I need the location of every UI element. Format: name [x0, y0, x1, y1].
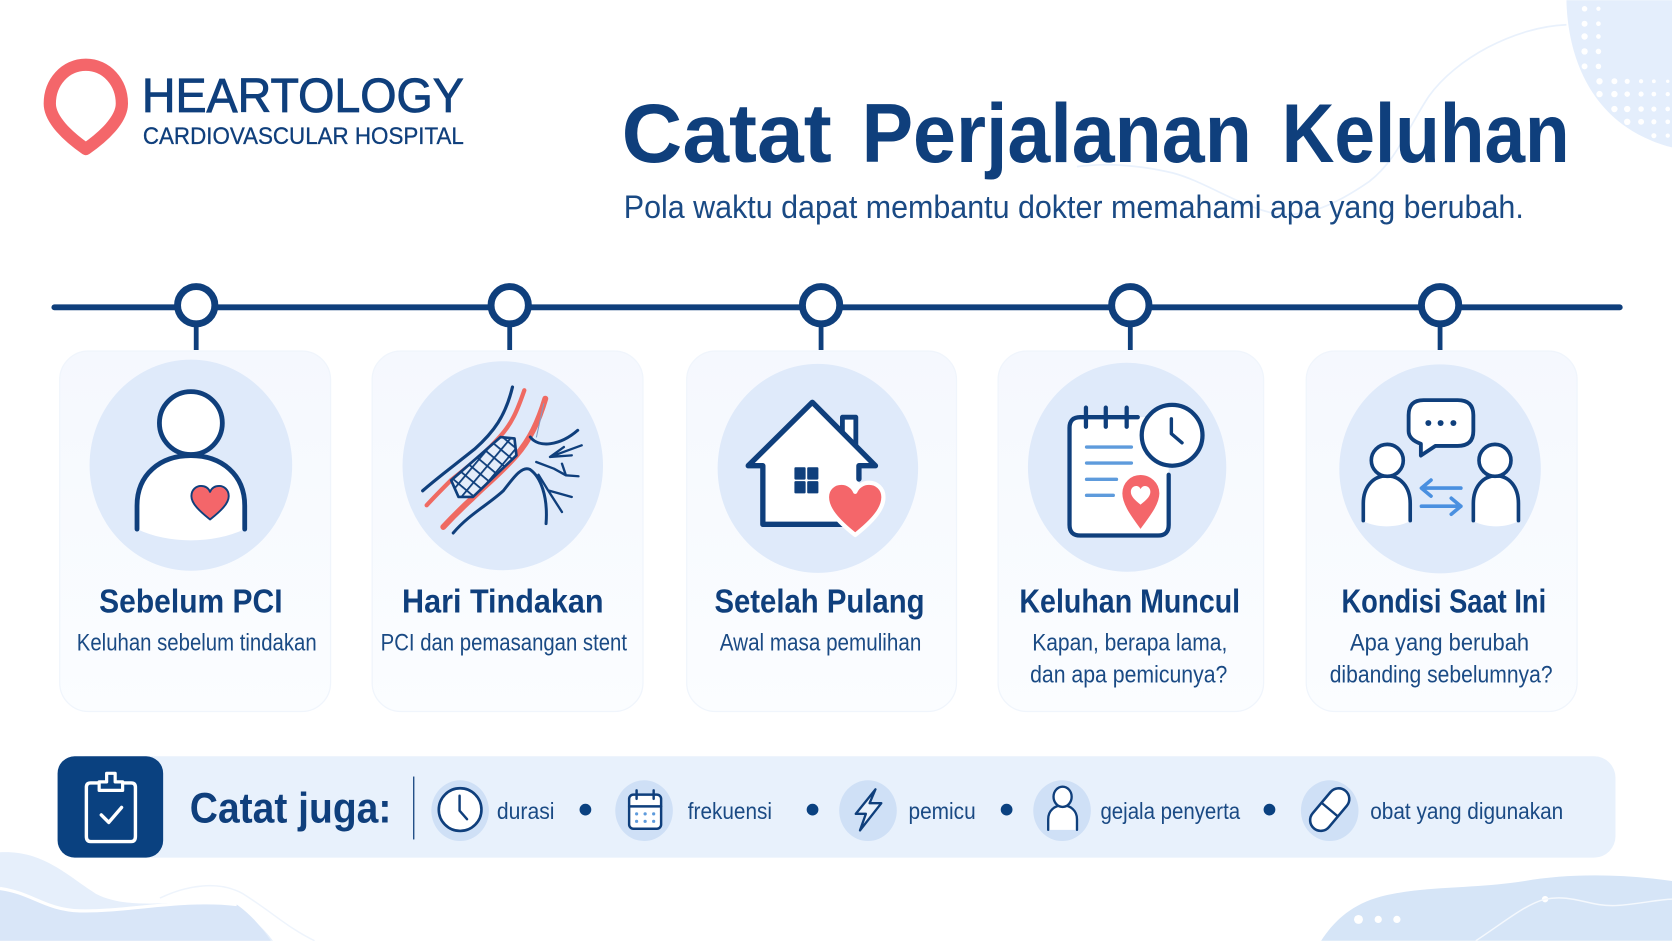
title: Perjalanan: [862, 87, 1252, 180]
panel: kondisi saat ini: [1306, 351, 1577, 711]
panel: setelah pulang: [687, 351, 956, 711]
card description: dibanding sebelumnya?: [1330, 662, 1553, 689]
icon: coral pin ring: [50, 65, 122, 149]
panel: sebelum PCI: [60, 351, 331, 711]
panel: keluhan muncul: [998, 351, 1264, 711]
logo: [50, 65, 464, 150]
card title: Keluhan Muncul: [1019, 583, 1240, 620]
item: durasi: durasi: [497, 798, 554, 824]
item: gejala penyerta: [1033, 780, 1241, 841]
icon: house with heart: [748, 402, 883, 535]
item: durasi: [431, 780, 554, 841]
icon: notepad with clock and pin: [1070, 405, 1202, 536]
icon: two people conversation: [1363, 400, 1518, 526]
panel: hari tindakan: [372, 351, 643, 711]
decoration: top right blob: [1077, 0, 1672, 215]
icon: artery with stent: [423, 387, 582, 533]
card description: Keluhan sebelum tindakan: [77, 630, 317, 657]
card title: Setelah Pulang: [714, 583, 925, 620]
card title: Sebelum PCI: [99, 583, 283, 620]
brand subtitle: CARDIOVASCULAR HOSPITAL: [143, 123, 464, 150]
timeline: [54, 287, 1620, 350]
item: obat yang digunakan: [1301, 780, 1563, 841]
brand name: HEARTOLOGY: [142, 70, 464, 123]
bar heading: Catat juga:: [190, 784, 391, 832]
card description: dan apa pemicunya?: [1030, 662, 1227, 689]
card description: Kapan, berapa lama,: [1032, 630, 1227, 657]
item: obat yang digunakan: obat yang digunakan: [1370, 798, 1563, 824]
item: pemicu: pemicu: [909, 798, 976, 824]
card description: [1330, 630, 1553, 689]
icon: clipboard check badge: [58, 756, 163, 858]
panel: catat juga bar: [58, 756, 1615, 858]
card description: Awal masa pemulihan: [720, 630, 921, 657]
item: gejala penyerta: gejala penyerta: [1100, 798, 1241, 824]
decoration: bottom right wave: [1321, 875, 1672, 941]
title: [622, 87, 1570, 180]
subtitle: Pola waktu dapat membantu dokter memahami apa yang berubah.: [624, 189, 1524, 225]
card description: [1030, 630, 1227, 689]
card description: Apa yang berubah: [1350, 630, 1529, 657]
title: Catat: [622, 87, 832, 180]
item: frekuensi: frekuensi: [688, 798, 772, 824]
title: Keluhan: [1282, 87, 1570, 180]
decoration: bottom left wave: [0, 852, 315, 941]
card title: Hari Tindakan: [402, 583, 604, 620]
card title: Kondisi Saat Ini: [1341, 583, 1546, 620]
item: pemicu: [839, 780, 976, 841]
icon: person with heart: [137, 392, 245, 540]
item: frekuensi: [615, 780, 772, 841]
card description: PCI dan pemasangan stent: [381, 630, 627, 657]
